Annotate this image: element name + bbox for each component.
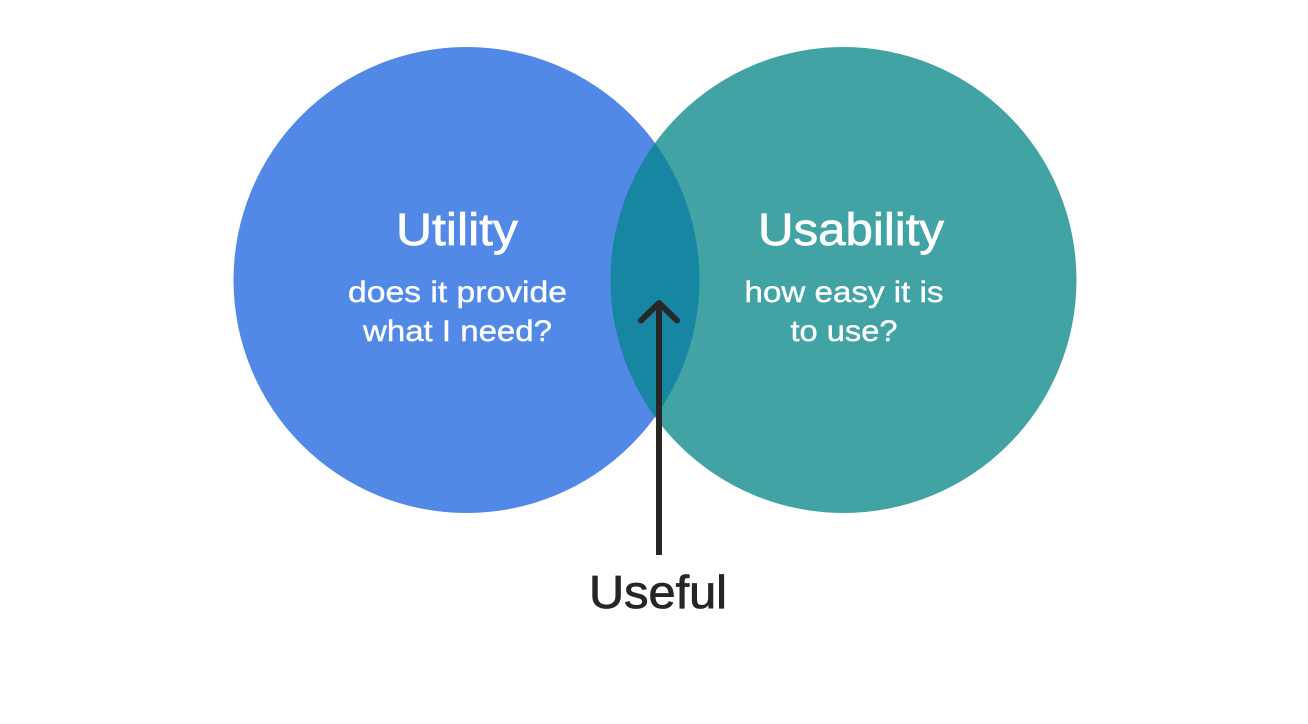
panel text: usability	[744, 204, 945, 348]
text: usability question	[744, 276, 944, 348]
venn diagram	[234, 47, 1076, 609]
text: utility question: what I need?	[362, 315, 552, 348]
heading: usability: Usability	[758, 204, 945, 255]
circle: utility	[234, 47, 700, 513]
label: useful: Useful	[589, 566, 727, 618]
text: utility question: does it provide	[348, 276, 567, 309]
panel text: utility	[348, 204, 567, 348]
text: usability question: how easy it is	[744, 276, 944, 309]
heading: utility: Utility	[396, 204, 519, 255]
text: usability question: to use?	[790, 315, 898, 348]
text: utility question	[348, 276, 567, 348]
overlap: useful region	[610, 143, 700, 417]
arrow: pointing to overlap	[641, 303, 677, 555]
circle: usability	[610, 47, 1076, 513]
